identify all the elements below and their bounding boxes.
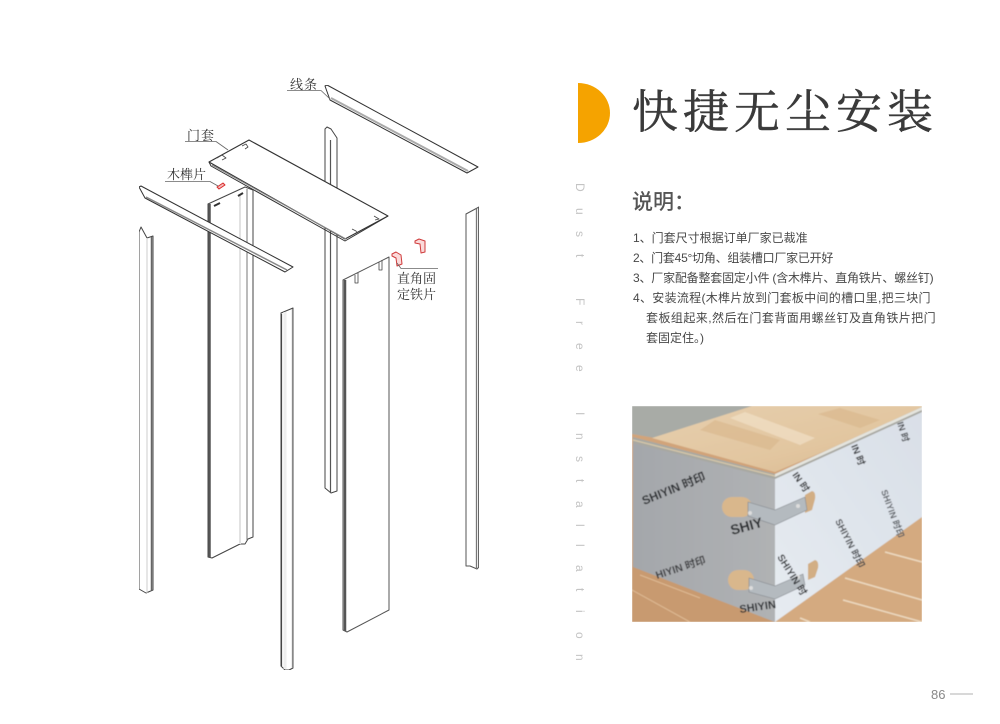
part: vertical strip behind panel (325, 127, 337, 493)
installation notes text block: 套固定住。) (646, 331, 704, 345)
part: front door panel with slots (343, 257, 389, 632)
red wooden tenon piece (217, 183, 225, 189)
red angle bracket left (392, 252, 402, 266)
brackets (748, 497, 807, 525)
installation notes text block: 套板组起来,然后在门套背面用螺丝钉及直角铁片把门 (646, 311, 936, 325)
installation notes text block: 1、门套尺寸根据订单厂家已裁准 (633, 231, 808, 245)
vertical English caption: Dust Free Installation (573, 183, 587, 661)
photo: assembled door frame corner: SHIYIN 时印 (879, 488, 907, 539)
subheading: notes: 说明： (632, 191, 695, 214)
label: angle iron (397, 263, 438, 302)
page number rule (950, 693, 973, 695)
part: top-right trim strip (325, 85, 478, 173)
label: angle iron: 定铁片 (397, 287, 436, 302)
photo: assembled door frame corner: SHIYIN (739, 599, 777, 616)
installation notes text block: 2、门套45°切角、组装槽口厂家已开好 (633, 251, 833, 265)
photo: assembled door frame corner: SHIYIN 时 (774, 552, 810, 598)
label: wooden tenon (165, 167, 218, 186)
red angle bracket right (415, 239, 425, 253)
photo: assembled door frame corner: IN 时 (895, 420, 912, 443)
label: wooden tenon: 木榫片 (167, 167, 206, 182)
part: left horizontal strip (139, 186, 293, 272)
installation notes text block: 4、安装流程(木榫片放到门套板中间的槽口里,把三块门 (633, 291, 931, 305)
photo: assembled door frame corner: HIYIN 时印 (654, 553, 707, 582)
label: trim: 线条 (290, 77, 318, 92)
label: angle iron: 直角固 (397, 271, 436, 286)
installation notes text block: 3、厂家配备整套固定小件 (含木榫片、直角铁片、螺丝钉) (633, 271, 933, 285)
part: top door panel (209, 140, 388, 241)
page number: 86 (931, 687, 945, 702)
photo: assembled door frame corner: IN 时 (790, 470, 812, 495)
photo: assembled door frame corner: SHIY (729, 514, 765, 538)
title: 快捷无尘安装 (632, 87, 938, 138)
photo: assembled door frame corner: SHIYIN 时印 (832, 517, 867, 570)
label: door frame (185, 128, 228, 150)
part: right vertical strip (466, 207, 479, 569)
part: center slim strip (281, 308, 293, 670)
slots (722, 497, 752, 517)
installation notes text block (633, 231, 936, 345)
photo: assembled door frame corner (632, 406, 922, 622)
floor boards (775, 517, 922, 622)
orange half circle (578, 83, 610, 143)
label: trim (287, 77, 330, 99)
photo: assembled door frame corner: IN 时 (848, 443, 868, 468)
label: door frame: 门套 (187, 128, 215, 143)
part: U-channel door panel (208, 187, 253, 558)
brand marks: SHIYIN 时印 (640, 470, 708, 508)
part: vertical strip far left (139, 227, 153, 593)
